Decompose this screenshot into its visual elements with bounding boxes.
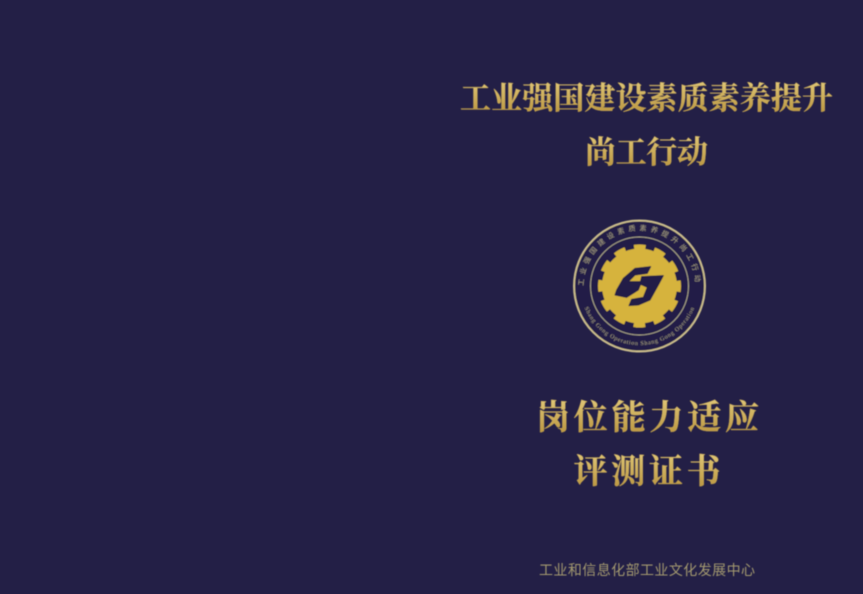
certificate name: 评测证书 [574,453,722,491]
emblem: ring text [578,224,702,346]
emblem: inner ring [590,237,688,335]
title [460,81,833,170]
title: 尚工行动 [585,135,708,170]
title: 工业强国建设素质素养提升 [460,81,833,116]
emblem: ring text: Shang Gong Operation Shang Gong Operation [584,306,695,346]
issuing organisation: 工业和信息化部工业文化发展中心 [539,562,755,578]
emblem: clasped S mark [615,267,663,306]
emblem: ring text: 工业强国建设素质素养提升尚工行动 [578,224,702,286]
certificate name [536,399,759,491]
emblem: outer ring [574,220,705,352]
emblem: gear [600,247,678,325]
certificate name: 岗位能力适应 [536,399,759,437]
emblem [572,218,707,354]
